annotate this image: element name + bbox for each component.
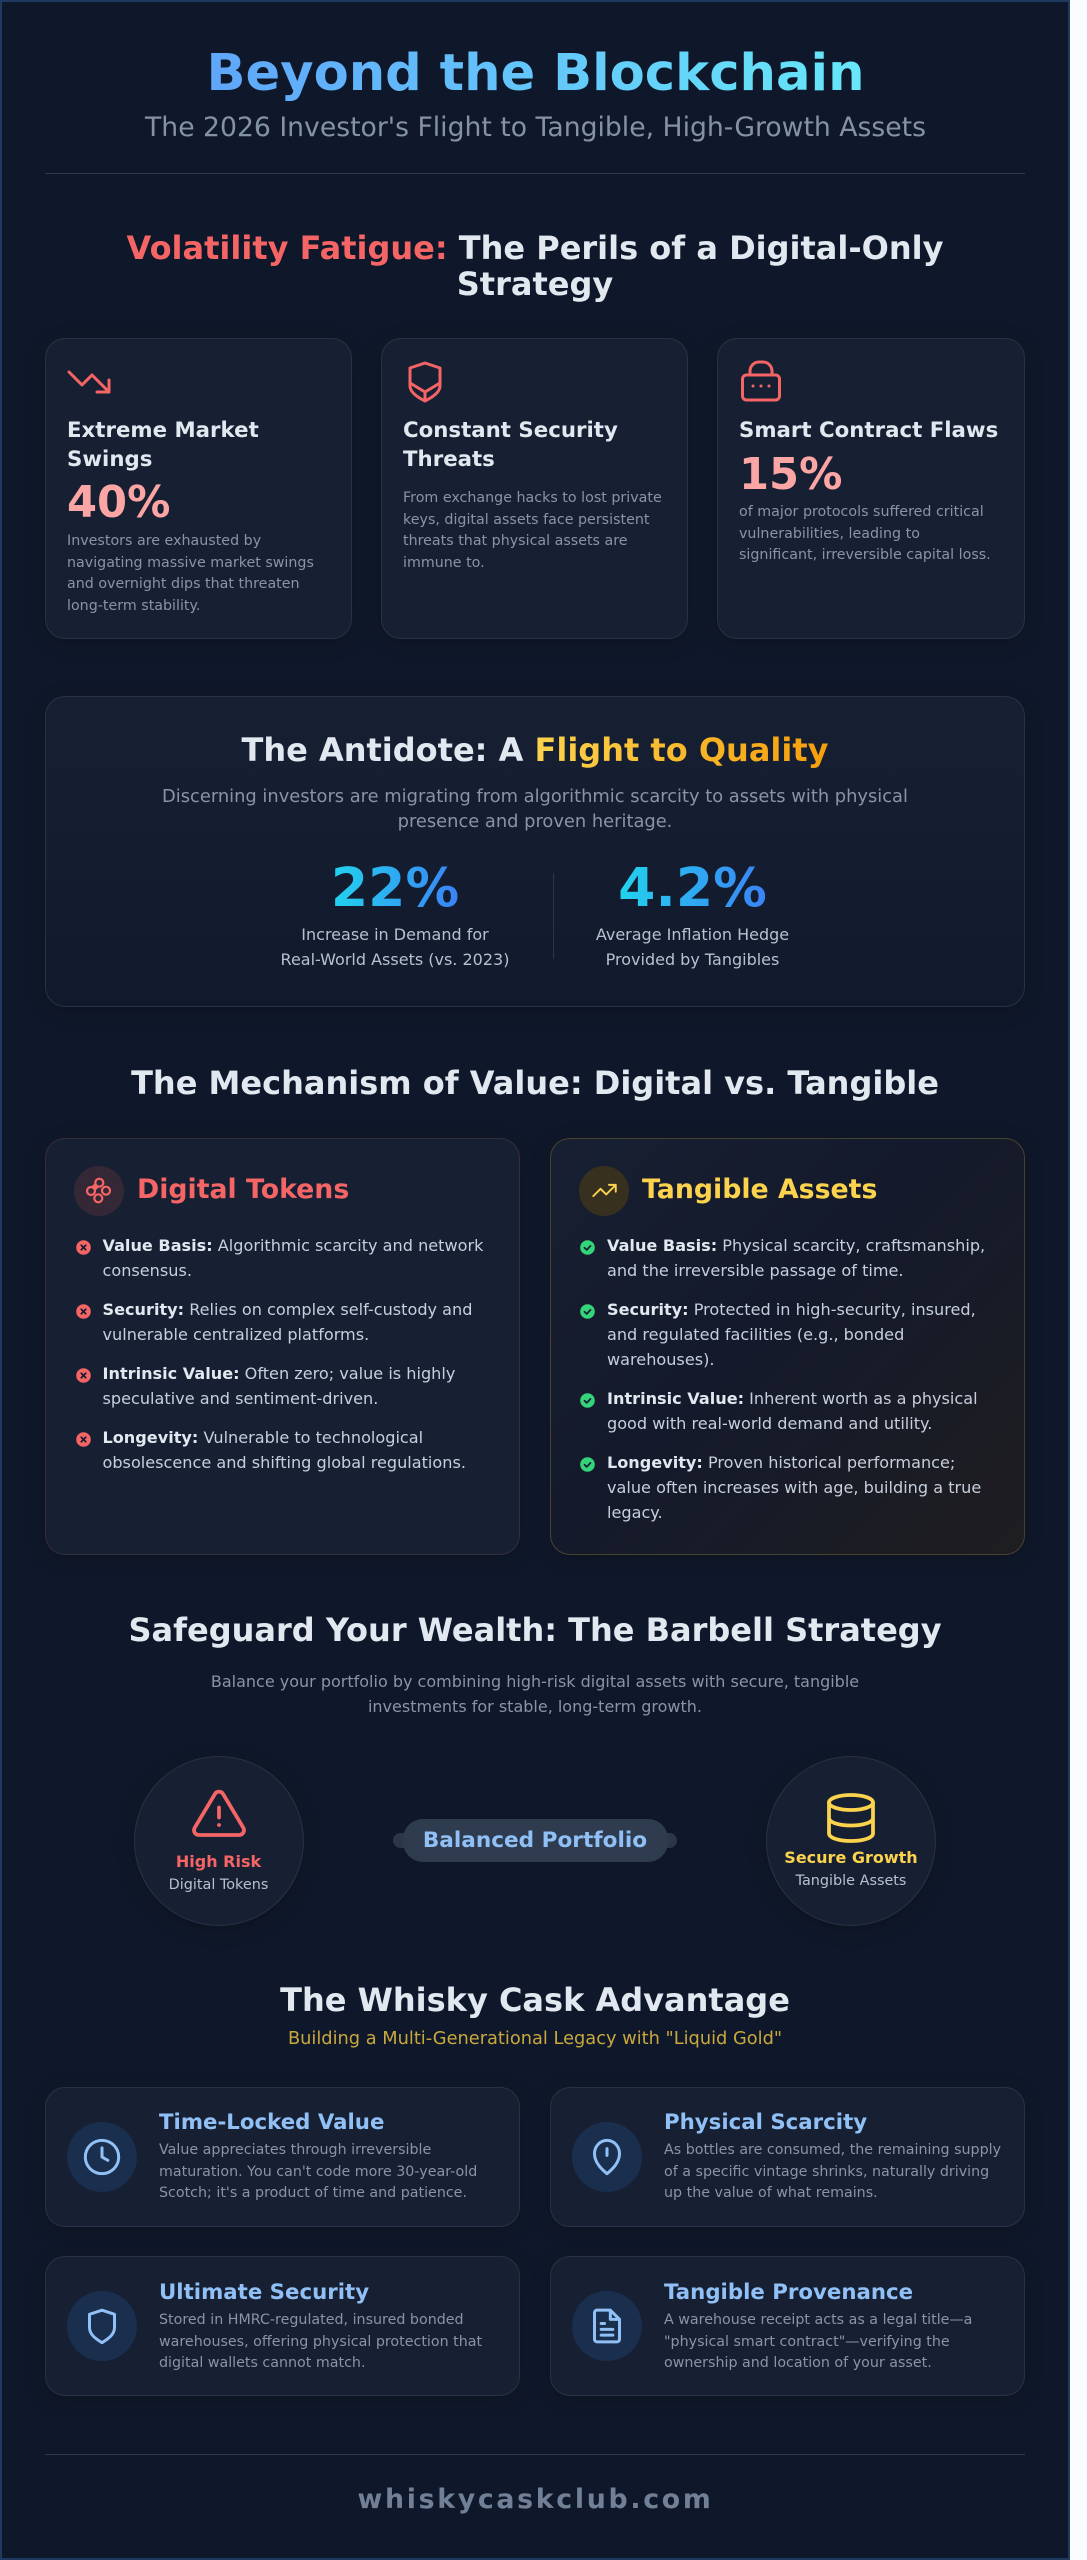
stat: 22%: 22% [331,856,459,918]
sublabel: Tangible Assets [796,1873,906,1889]
panel: constant security threats [381,338,688,639]
stat: 22% [281,856,509,968]
item: longevity: legacy. [607,1503,663,1522]
card text: of major protocols suffered critical [739,504,984,520]
card title: Threats [403,447,495,472]
antidote text [162,786,908,832]
icon: cross [76,1368,91,1383]
footer: whiskycaskclub.com [358,2484,713,2514]
title: Beyond the Blockchain [206,43,865,103]
card text: Value appreciates through irreversible [159,2142,431,2158]
antidote text: presence and proven heritage. [398,810,672,832]
heading: barbell strategy: Safeguard Your Wealth: The Barbell Strategy [128,1611,942,1649]
panel title: Tangible Assets [642,1174,877,1205]
card text [664,2142,1001,2201]
card title: Ultimate Security [159,2280,369,2304]
icon: shield [67,2291,137,2361]
card title [67,418,259,472]
heading: whisky cask advantage: The Whisky Cask Advantage [280,1981,790,2019]
card title: Swings [67,447,152,472]
icon: trending up [579,1166,629,1216]
stat label [281,924,509,968]
card text: As bottles are consumed, the remaining supply [664,2142,1001,2158]
stat: 4.2%: 4.2% [618,856,767,918]
card title: Tangible Provenance [664,2280,913,2304]
panel: the antidote [45,696,1025,1007]
panel: tangible assets [550,1138,1025,1555]
card text: up the value of what remains. [664,2185,878,2201]
sublabel: Digital Tokens [169,1877,268,1893]
card title: Physical Scarcity [664,2110,867,2135]
icon: warning triangle [192,1790,246,1837]
barbell: connector bar [393,1833,677,1848]
stat label: Real-World Assets (vs. 2023) [281,950,509,968]
item: value basis: and the irreversible passage of time. [607,1261,904,1280]
card text: immune to. [403,555,485,571]
card text: Stored in HMRC-regulated, insured bonded [159,2312,464,2328]
card text: "physical smart contract"—verifying the [664,2334,950,2350]
card: tangible provenance [550,2256,1025,2396]
item: security: Security: Protected in high-security, insured, [607,1300,976,1319]
card text: warehouses, offering physical protection that [159,2334,482,2350]
stat: 4.2% [596,856,789,968]
icon: check [580,1304,595,1319]
stat: 40%: 40% [67,478,170,528]
card text: long-term stability. [67,598,200,614]
card title: Constant Security [403,418,618,443]
balanced portfolio pill: Balanced Portfolio [423,1828,647,1853]
panel title: Digital Tokens [137,1174,349,1205]
item: intrinsic value: Intrinsic Value: Inherent worth as a physical [607,1389,978,1408]
barbell: secure growth [766,1756,936,1926]
item: value basis [102,1236,484,1280]
card text [664,2312,972,2371]
card text: navigating massive market swings [67,555,314,571]
item: intrinsic value [607,1389,978,1433]
item: security: Security: Relies on complex self-custody and [102,1300,472,1319]
heading: volatility fatigue: Volatility Fatigue: The Perils of a Digital-Only [127,229,943,267]
card text: From exchange hacks to lost private [403,490,662,506]
card text: keys, digital assets face persistent [403,512,649,528]
item: longevity: value often increases with age, building a true [607,1478,981,1497]
card text [739,504,991,563]
item: longevity: obsolescence and shifting global regulations. [102,1453,466,1472]
card text [159,2142,477,2201]
card text [67,533,314,614]
card text: threats that physical assets are [403,533,628,549]
item: value basis: Value Basis: Algorithmic scarcity and network [102,1236,483,1255]
icon: check [580,1240,595,1255]
icon: cross [76,1304,91,1319]
item: value basis: Value Basis: Physical scarcity, craftsmanship, [607,1236,985,1255]
barbell: high risk [134,1756,304,1926]
heading: volatility fatigue [126,229,943,303]
card: physical scarcity [550,2086,1025,2227]
card text: digital wallets cannot match. [159,2355,366,2371]
icon: check [580,1457,595,1472]
item: intrinsic value: speculative and sentiment-driven. [102,1389,378,1408]
card text: A warehouse receipt acts as a legal title—a [664,2312,972,2328]
item: value basis: consensus. [102,1261,192,1280]
subtitle: The 2026 Investor's Flight to Tangible, High-Growth Assets [145,112,926,143]
card text: Investors are exhausted by [67,533,261,549]
item: security: and regulated facilities (e.g., bonded [607,1325,904,1344]
card text: of a specific vintage shrinks, naturally driving [664,2164,989,2180]
item: security: warehouses). [607,1350,715,1369]
barbell text: investments for stable, long-term growth. [368,1696,702,1716]
icon: document [572,2291,642,2361]
label: High Risk [176,1852,261,1871]
icon: shield [408,362,442,402]
icon: clock [67,2122,137,2192]
whisky subheading: Building a Multi-Generational Legacy with "Liquid Gold" [288,2028,782,2049]
item: longevity [607,1453,981,1522]
stat label: Increase in Demand for [301,924,489,944]
stat label: Average Inflation Hedge [596,924,789,944]
panel: smart contract flaws [717,338,1025,639]
icon: database [827,1793,875,1843]
icon: check [580,1393,595,1408]
card title: Time-Locked Value [159,2110,384,2135]
item: intrinsic value [102,1364,455,1408]
item: value basis [607,1236,985,1280]
stat label: Provided by Tangibles [606,950,779,968]
item: intrinsic value: Intrinsic Value: Often zero; value is highly [102,1364,455,1383]
card text: maturation. You can't code more 30-year-old [159,2164,477,2180]
card text [159,2312,482,2371]
card text: ownership and location of your asset. [664,2355,932,2371]
item: intrinsic value: good with real-world demand and utility. [607,1414,932,1433]
stat label [596,924,789,968]
item: security: vulnerable centralized platforms. [102,1325,369,1344]
item: longevity [102,1428,466,1472]
heading: mechanism of value: The Mechanism of Value: Digital vs. Tangible [131,1064,939,1102]
card: ultimate security [45,2256,520,2396]
barbell text: Balance your portfolio by combining high-risk digital assets with secure, tangible [211,1672,859,1691]
card title [403,418,618,472]
card text [403,490,662,571]
card title: Extreme Market [67,418,259,443]
panel: extreme market swings [45,338,352,639]
item: security [102,1300,472,1344]
icon: cross [76,1432,91,1447]
antidote text: Discerning investors are migrating from algorithmic scarcity to assets with physical [162,786,908,806]
card text: and overnight dips that threaten [67,576,300,592]
balanced portfolio pill [402,1819,668,1862]
stat: 15%: 15% [739,450,842,500]
heading: volatility fatigue: Strategy [457,265,613,303]
icon: cross [76,1240,91,1255]
icon: pin [572,2122,642,2192]
card text: vulnerabilities, leading to [739,526,920,542]
card text: significant, irreversible capital loss. [739,547,991,563]
item: security [607,1300,976,1369]
item: longevity: Longevity: Proven historical performance; [607,1453,955,1472]
label: Secure Growth [784,1848,918,1867]
icon: token cluster [74,1166,124,1216]
icon: trending down [67,370,111,394]
icon: lock [741,360,781,402]
barbell text [211,1672,859,1716]
card title: Smart Contract Flaws [739,418,998,443]
card: time-locked value [45,2086,520,2227]
item: longevity: Longevity: Vulnerable to technological [102,1428,423,1447]
card text: Scotch; it's a product of time and patience. [159,2185,467,2201]
panel: digital tokens [45,1138,520,1555]
heading: flight to quality: The Antidote: A Flight to Quality [241,731,828,769]
